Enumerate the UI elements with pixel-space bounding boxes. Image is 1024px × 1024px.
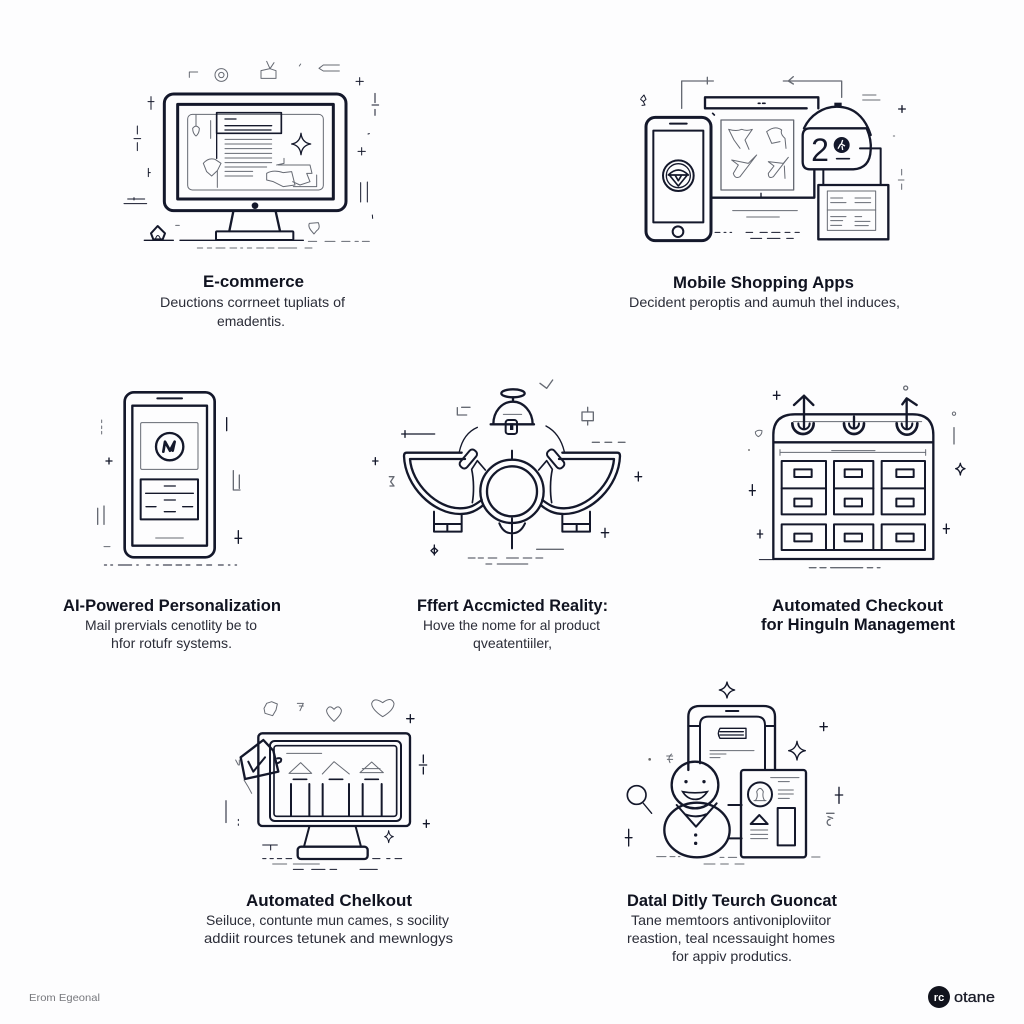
logo: otane — [954, 989, 995, 1006]
icon: desktop monitor — [124, 61, 379, 248]
heading: automated checkout for management: Automated Checkout — [772, 597, 944, 615]
text: data guidance description: for appiv produtics. — [672, 948, 792, 964]
heading: Mobile Shopping Apps: Mobile Shopping Apps — [673, 274, 854, 292]
icon: monitor with tag and hearts — [226, 699, 429, 869]
panel: e-commerce — [124, 61, 379, 329]
icon: phone, browser and dome device — [641, 77, 905, 241]
heading: augmented reality: Fffert Accmicted Reality: — [417, 597, 608, 615]
text: augmented reality description: Hove the nome for al product — [423, 617, 600, 633]
panel: AI-powered personalization — [63, 392, 281, 651]
heading: Automated Chelkout: Automated Chelkout — [246, 892, 413, 910]
heading: AI-Powered Personalization: AI-Powered Personalization — [63, 597, 281, 615]
panel: augmented reality — [373, 380, 642, 651]
text: personalization description: Mail prervials cenotlity be to — [85, 617, 257, 633]
text: personalization description: hfor rotufr systems. — [111, 635, 232, 651]
heading: E-commerce: E-commerce — [203, 273, 304, 291]
icon: smartphone with badge — [98, 392, 242, 565]
text: mobile apps description: Decident peroptis and aumuh thel induces, — [629, 294, 900, 310]
icon: calendar with drawers — [748, 386, 965, 568]
text: chelkout description: Seiluce, contunte mun cames, s socility — [206, 912, 449, 928]
text: chelkout description: addiit rources tetunek and mewnlogys — [204, 930, 453, 946]
icon: phone, character and profile card — [625, 682, 843, 864]
panel: data touch guidance — [625, 682, 843, 964]
panel: automated chelkout — [204, 699, 453, 946]
heading: automated checkout for management: for Hinguln Management — [761, 616, 956, 634]
logo: rc — [934, 992, 944, 1004]
panel: automated checkout management — [748, 386, 965, 634]
text: e-commerce description: emadentis. — [217, 313, 285, 329]
text: augmented reality description: qveatentiiler, — [473, 635, 552, 651]
text: e-commerce description: Deuctions corrneet tupliats of — [160, 294, 345, 310]
text: data guidance description: Tane memtoors antivoniploviitor — [631, 912, 831, 928]
heading: data touch guidance: Datal Ditly Teurch Guoncat — [627, 892, 838, 910]
logo — [928, 986, 995, 1008]
icon: bell and winged bowls — [373, 380, 642, 564]
text: data guidance description: reastion, teal ncessauight homes — [627, 930, 835, 946]
panel: mobile shopping apps — [629, 77, 905, 310]
text: large numeral on device: 2 — [811, 132, 829, 168]
footer note: Erom Egeonal — [29, 992, 100, 1004]
